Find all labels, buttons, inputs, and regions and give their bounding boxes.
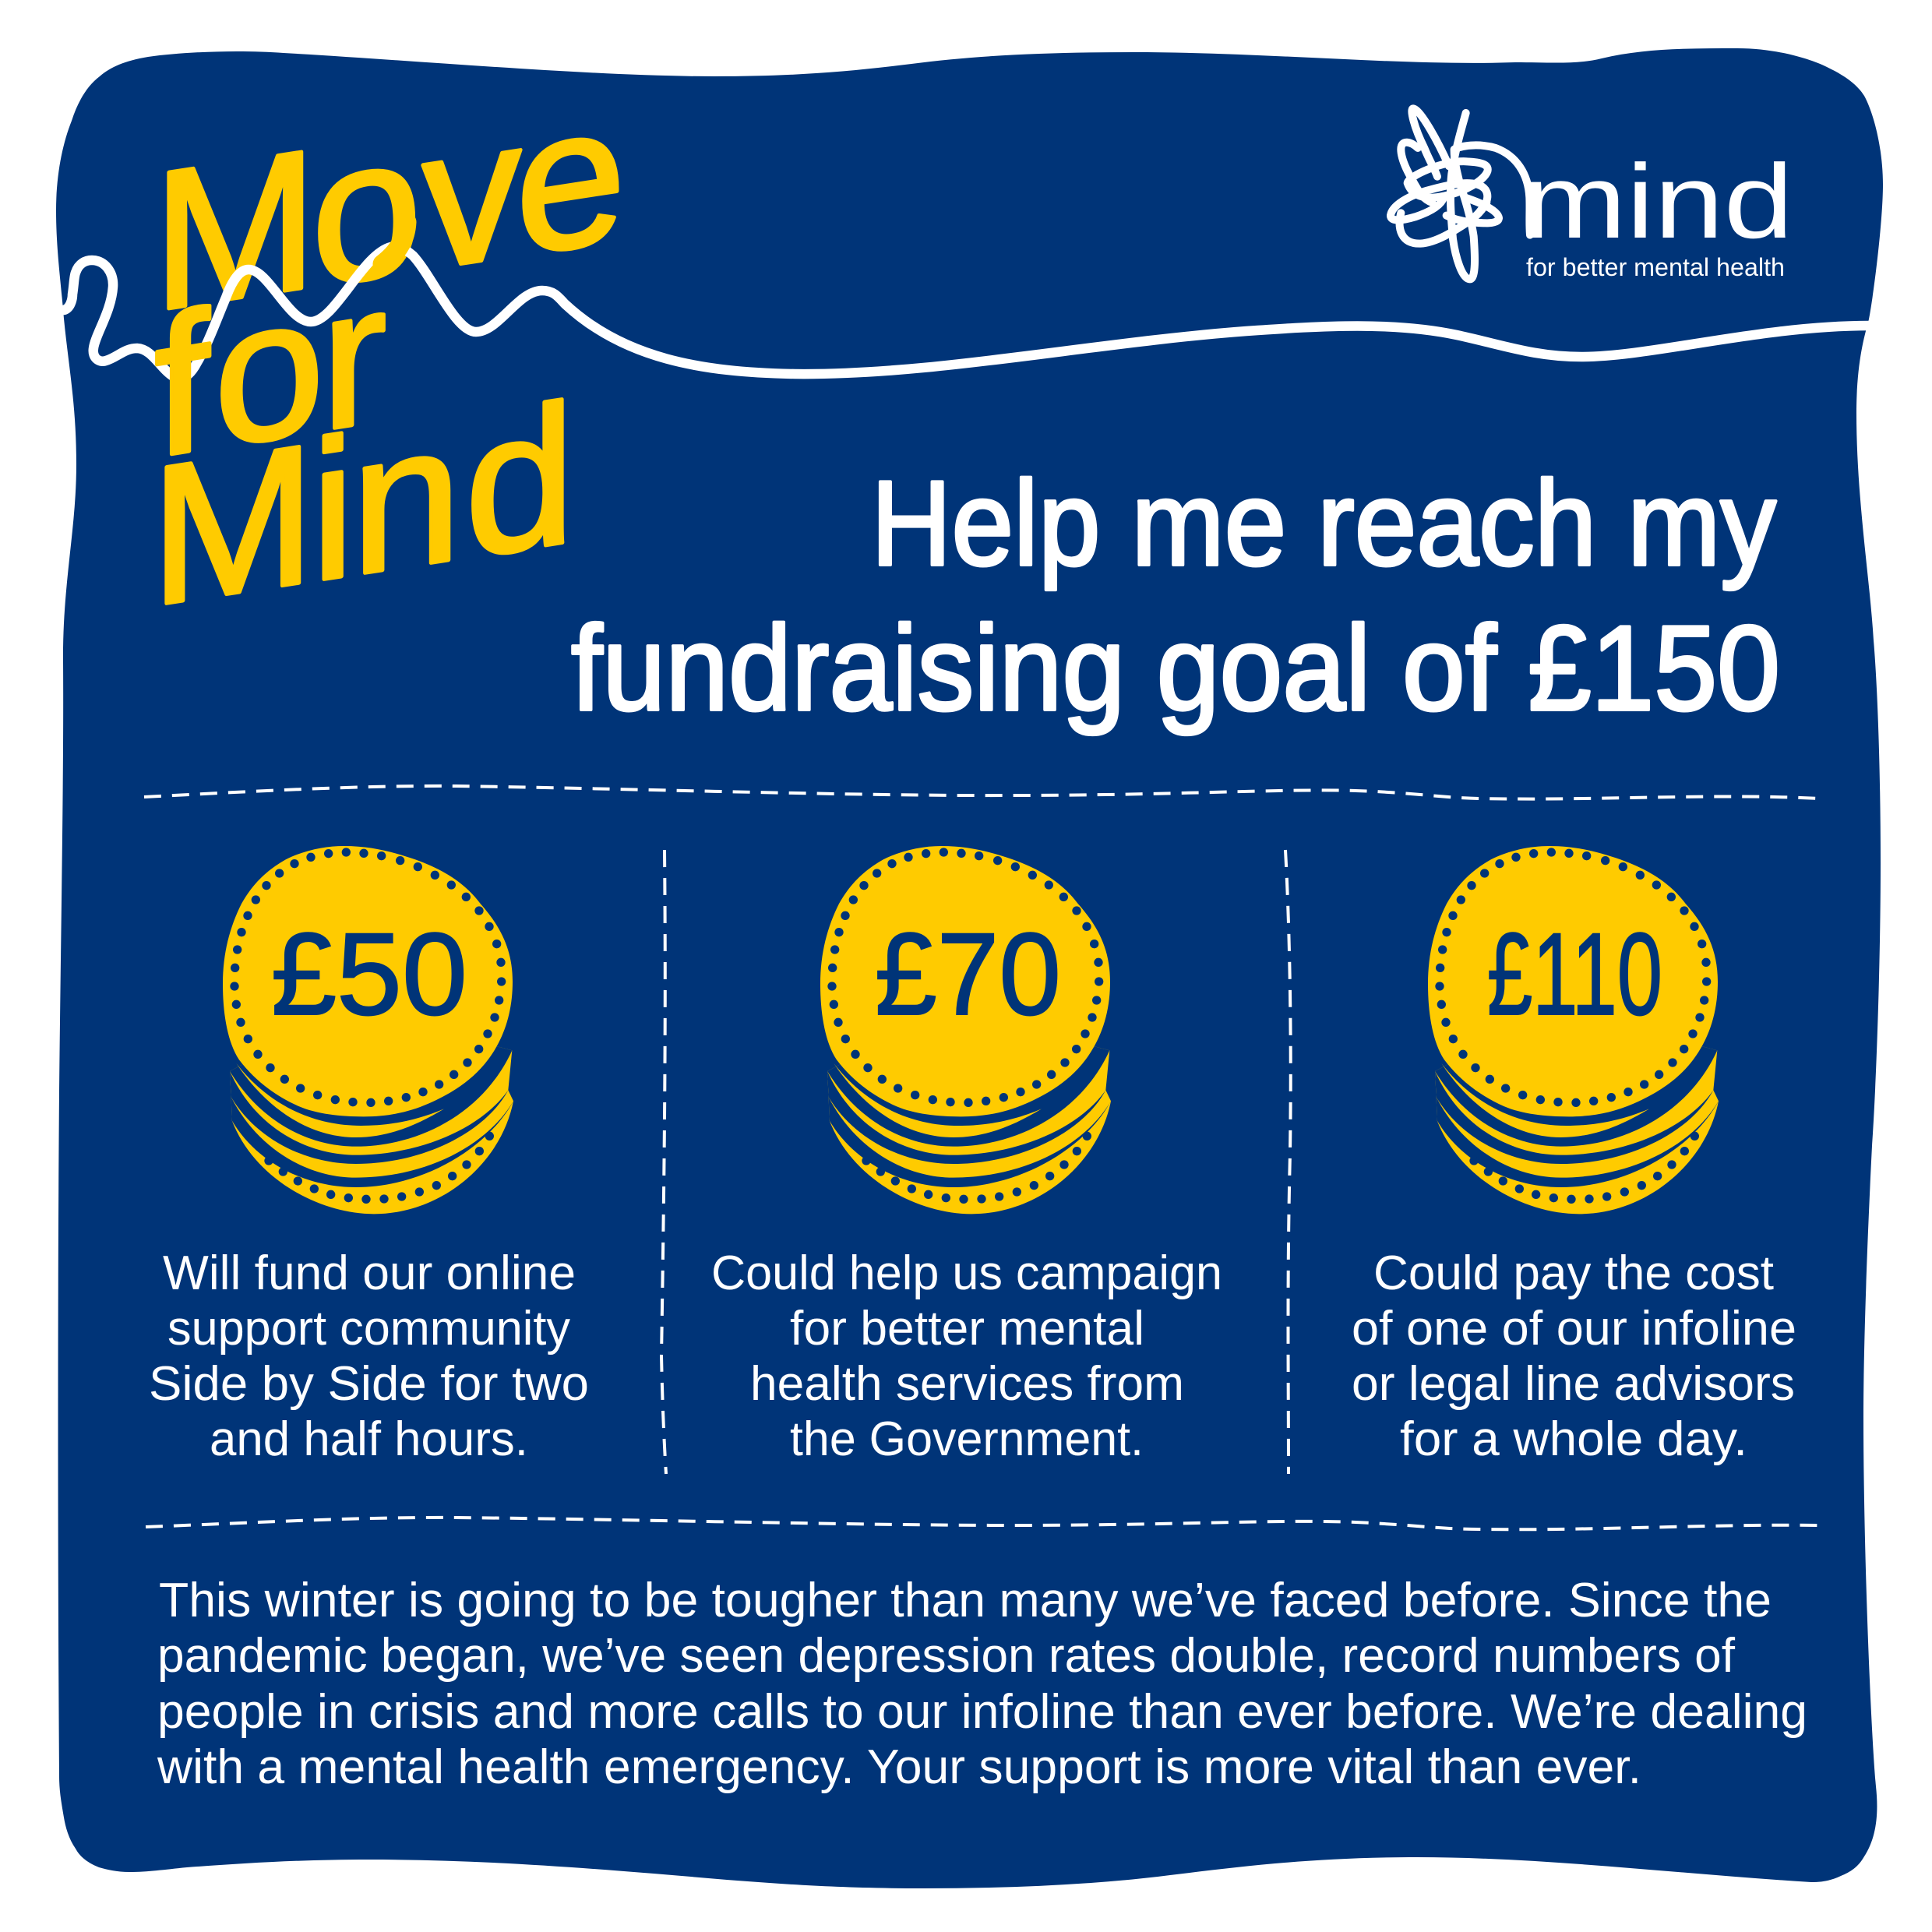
description: Could help us campaign bbox=[711, 1246, 1222, 1300]
logo wordmark: mind bbox=[1522, 143, 1793, 260]
description: health services from bbox=[750, 1357, 1184, 1411]
text block: closing paragraph: This winter is going to be tougher than many we’ve faced before. Since the bbox=[159, 1574, 1772, 1627]
icon: scribble bbox=[1391, 108, 1530, 279]
panel: £50 donation bbox=[149, 846, 589, 1466]
panel: £110 donation bbox=[1352, 846, 1796, 1466]
panel: £70 donation bbox=[711, 846, 1222, 1466]
title: for: for bbox=[154, 242, 387, 499]
description: Will fund our online bbox=[163, 1246, 576, 1300]
description: for a whole day. bbox=[1400, 1412, 1747, 1466]
description bbox=[1352, 1246, 1796, 1466]
description: of one of our infoline bbox=[1352, 1302, 1796, 1356]
text block: closing paragraph: people in crisis and more calls to our infoline than ever before. We’re dealing bbox=[157, 1685, 1807, 1739]
text block: closing paragraph: with a mental health emergency. Your support is more vital than ever. bbox=[157, 1740, 1641, 1794]
description: and half hours. bbox=[210, 1412, 528, 1466]
description bbox=[711, 1246, 1222, 1466]
description: or legal line advisors bbox=[1352, 1357, 1795, 1411]
description: Could pay the cost bbox=[1373, 1246, 1774, 1300]
logo: Mind bbox=[1391, 108, 1793, 281]
description: Side by Side for two bbox=[149, 1357, 589, 1411]
heading: fundraising goal: Help me reach my bbox=[871, 456, 1776, 591]
text block: closing paragraph bbox=[157, 1574, 1807, 1794]
heading: fundraising goal bbox=[571, 456, 1780, 735]
wavy white line bbox=[64, 246, 1870, 378]
icon: coin stack £70 bbox=[820, 846, 1111, 1214]
logo strapline: for better mental health bbox=[1526, 253, 1785, 281]
description: for better mental bbox=[790, 1302, 1144, 1356]
icon: coin stack £50 bbox=[223, 846, 513, 1214]
title: Move: Move bbox=[153, 60, 626, 354]
coin value: £50 bbox=[271, 908, 467, 1039]
icon: coin stack £110 bbox=[1428, 846, 1719, 1214]
coin value: £70 bbox=[875, 908, 1061, 1039]
title: letter o overlap bbox=[383, 222, 407, 264]
heading: fundraising goal: fundraising goal of £150 bbox=[571, 601, 1780, 735]
coin value: £110 bbox=[1487, 908, 1662, 1039]
description: the Government. bbox=[790, 1412, 1144, 1466]
description bbox=[149, 1246, 589, 1466]
description: support community bbox=[167, 1302, 570, 1356]
title: Mind: Mind bbox=[150, 362, 575, 648]
text block: closing paragraph: pandemic began, we’ve seen depression rates double, record numbers of bbox=[157, 1629, 1736, 1683]
